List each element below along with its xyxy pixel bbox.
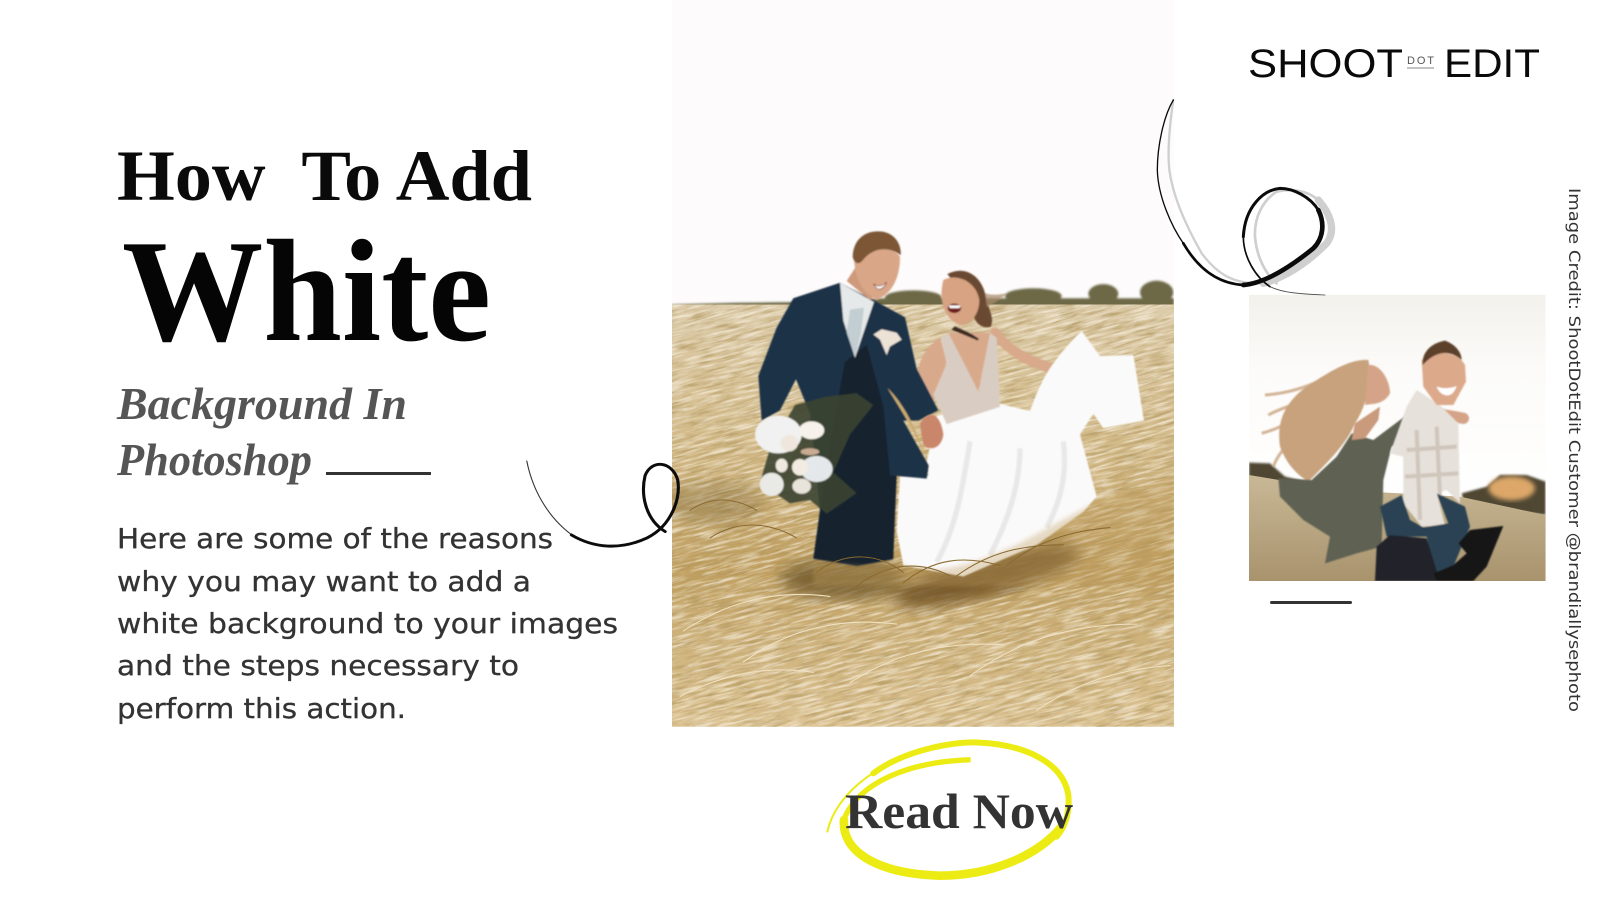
sky bbox=[672, 0, 1174, 305]
dark trousers bbox=[1375, 535, 1440, 581]
logo bbox=[1248, 42, 1540, 86]
field bbox=[1249, 475, 1546, 581]
body text: why you may want to add a bbox=[117, 566, 531, 598]
smile bbox=[873, 282, 887, 289]
windswept hair bbox=[1279, 360, 1370, 482]
head bbox=[854, 248, 900, 300]
left swirl bbox=[527, 461, 678, 546]
logo: DOT bbox=[1407, 55, 1434, 67]
mouth bbox=[948, 303, 961, 313]
neck bbox=[846, 268, 873, 300]
dress bbox=[897, 331, 1144, 577]
yellow scribble bbox=[827, 741, 1069, 876]
black stroke bbox=[1157, 100, 1325, 295]
boutonniere bbox=[873, 329, 902, 355]
suit bbox=[758, 283, 938, 566]
head bbox=[1422, 353, 1466, 405]
Background In: Background In bbox=[116, 378, 407, 429]
arm bbox=[995, 333, 1057, 370]
hair bbox=[853, 231, 901, 263]
boots bbox=[1433, 526, 1503, 581]
grey echo stroke bbox=[1169, 100, 1332, 283]
groom bbox=[758, 231, 938, 566]
body text: Here are some of the reasons bbox=[117, 523, 553, 555]
grass field bbox=[672, 304, 1174, 727]
arm bbox=[1417, 414, 1463, 418]
small photo: couple piggyback bbox=[1249, 295, 1546, 581]
read now button bbox=[827, 741, 1073, 876]
woman bbox=[1262, 360, 1463, 563]
blouse bbox=[1278, 405, 1420, 563]
dress folds bbox=[937, 441, 1064, 562]
image credit: Image Credit: ShootDotEdit Customer @brandiallysephoto bbox=[1565, 188, 1584, 712]
shoulder bbox=[1352, 407, 1380, 440]
heading bbox=[116, 136, 532, 485]
sunlit tree bbox=[1488, 476, 1535, 500]
body text: and the steps necessary to bbox=[117, 650, 519, 682]
shirt bbox=[1390, 390, 1460, 527]
White: White bbox=[122, 210, 491, 372]
bride bbox=[897, 271, 1144, 577]
heading rule bbox=[326, 472, 431, 475]
bouquet bbox=[755, 393, 873, 514]
right swirl bbox=[1157, 100, 1332, 295]
tie bbox=[847, 308, 864, 357]
grass in front of the couple bbox=[813, 476, 1174, 586]
hair bbox=[1423, 341, 1462, 365]
sky bbox=[1249, 294, 1546, 358]
head bbox=[941, 278, 979, 325]
lining of jacket bbox=[887, 388, 926, 457]
choker bbox=[953, 328, 978, 340]
logo: EDIT bbox=[1444, 42, 1540, 86]
jeans bbox=[1380, 493, 1470, 573]
hair bbox=[947, 271, 992, 327]
face bbox=[1365, 365, 1390, 405]
body text bbox=[117, 523, 618, 725]
clasped hands bbox=[920, 415, 943, 448]
windblown grass blades bbox=[680, 500, 1170, 710]
small photo rule bbox=[1270, 601, 1352, 604]
bodice bbox=[933, 333, 1000, 424]
hair strands bbox=[1260, 381, 1315, 468]
label: Read Now bbox=[845, 783, 1073, 839]
How To Add: How To Add bbox=[117, 136, 532, 216]
Photoshop: Photoshop bbox=[116, 434, 312, 485]
body text: white background to your images bbox=[117, 608, 618, 640]
tree line bbox=[672, 281, 1174, 307]
man bbox=[1375, 341, 1503, 581]
background trees bbox=[1249, 463, 1546, 515]
grin bbox=[1437, 386, 1457, 395]
plaid bbox=[1405, 427, 1458, 520]
body text: perform this action. bbox=[117, 693, 406, 725]
shirt bbox=[840, 283, 874, 358]
photo: bride and groom in a field bbox=[672, 230, 1174, 727]
logo: SHOOT bbox=[1248, 42, 1403, 86]
